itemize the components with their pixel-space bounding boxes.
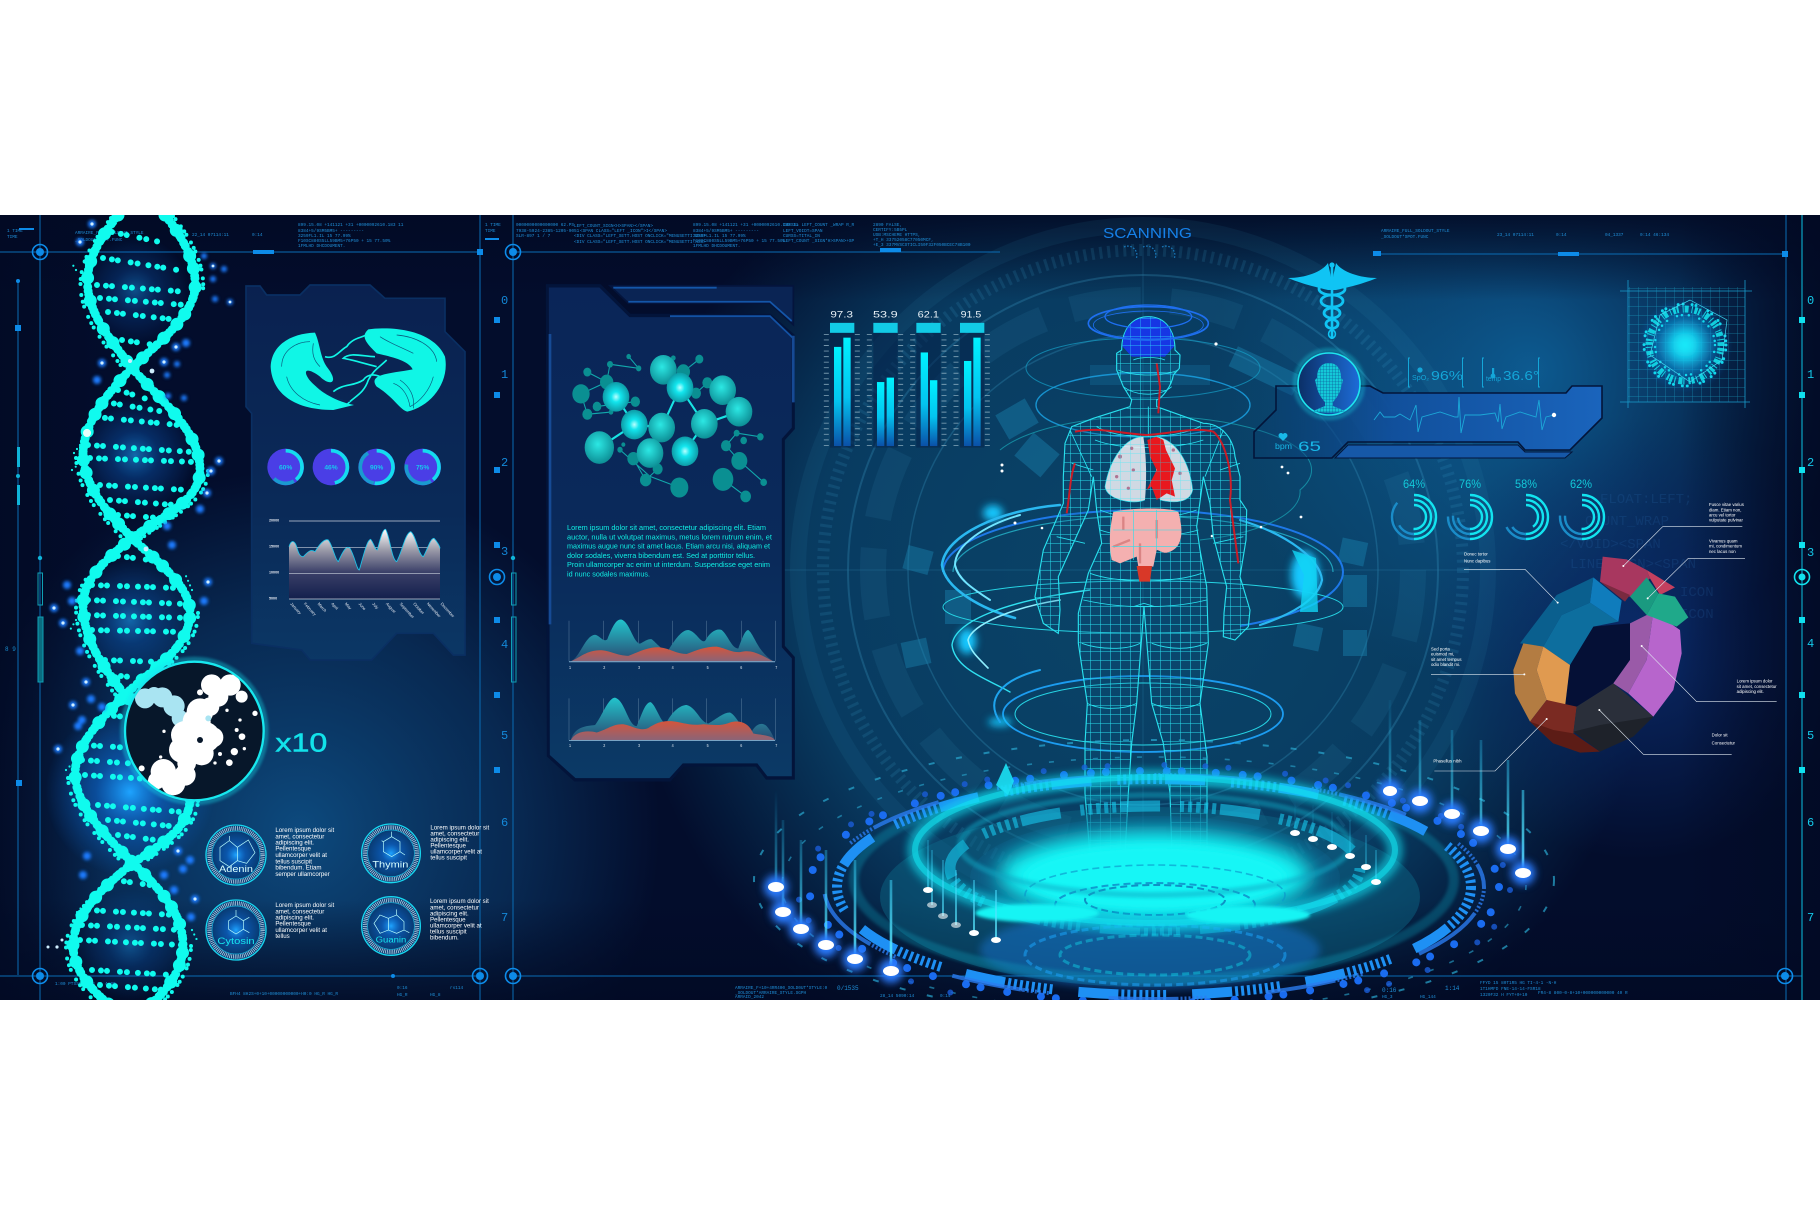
gauge 62 percent [1560,495,1604,539]
3D ring chart: euismod mi, [1431,652,1454,657]
area chart: August [385,601,398,615]
base: adenin: amet, consectetur [275,834,324,841]
DNA strands [66,215,208,1023]
micro text readouts: <SPAN CLASS="LEFT _ICON">I</SPAN> [580,229,667,234]
micro text readouts: LEFT_COUNT _SIGN*H>SPAN>+SP [783,239,855,244]
area chart two: 4 [672,743,674,748]
gauge 76 percent [1448,495,1492,539]
base: thymin: adipiscing elit. [430,837,469,844]
area chart: April [330,601,339,611]
micro text readouts: 1320F32 H FYT+0+10 [1480,993,1528,998]
micro text readouts: 0:14 46:134 [1640,233,1669,238]
bar chart: 62.1 [918,309,939,320]
area chart one: 6 [740,665,742,670]
base: adenin: semper ullamcorper [275,871,330,878]
area chart one: 3 [638,665,640,670]
base: thymin [362,824,489,883]
ring glows and swirls [942,342,1322,726]
frame lines and scale markers: 8 9 [5,646,16,653]
micro text readouts: 1:14 [1445,985,1460,992]
area chart two: 3 [638,743,640,748]
area chart: 15000 [269,545,279,549]
background: COUNT_WRAP [1585,514,1669,530]
area chart: March [317,601,328,613]
micro text readouts: HG_R [397,993,408,998]
base: thymin: amet, consectetur [430,831,479,838]
icon: caduceus [1288,262,1377,339]
background: FLOAT:LEFT; [1600,492,1692,508]
segment: blue [1520,577,1622,665]
area chart one: 2 [603,665,605,670]
panel text [567,523,772,578]
micro text readouts: 899.15.08 +141121 +31 +0000092610.183 11 [693,223,799,228]
panel text: Lorem ipsum dolor sit amet, consectetur adipiscing elit. Etiam [567,523,766,532]
base: cytosin: Lorem ipsum dolor sit [275,902,334,909]
micro text readouts: 04_1337 [1605,233,1624,238]
segment: charcoal [1573,683,1653,752]
heading: scanning: SCANNING [1103,225,1192,242]
brain cross-section [271,328,446,412]
bar chart: 91.5 [961,309,981,320]
micro text readouts: 0/1535 [837,985,859,992]
micro text readouts [7,223,1669,1000]
frame lines and scale markers: 6 [1807,816,1814,830]
progress dials: 46% [324,464,338,471]
bpm readout: bpm [1275,442,1292,451]
leader lines and labels [1431,527,1777,771]
area chart two: 7 [775,743,777,748]
background: ICON [1680,585,1714,601]
area chart: September [399,601,416,620]
frame lines and scale markers: 2 [1807,456,1814,470]
base: adenin [206,825,334,885]
area chart one: 4 [672,665,674,670]
area chart: June [358,601,368,612]
base: guanin: amet, consectetur [430,904,479,911]
progress dials: 75% [416,464,429,471]
micro text readouts: 28_14 5090:14 [880,994,915,999]
micro text readouts: F10SC880S5LL59BM5+76P50 + 15 77.50% [693,239,786,244]
base: adenin: bibendum. Etiam [275,865,322,872]
frame lines and scale markers: 1 [501,368,508,382]
base: cytosin: Pellentesque [275,920,312,927]
base: thymin: tellus suscipit [430,855,467,862]
micro text readouts: ARRAIRE_FULL_SOLDOUT_STYLE [75,231,144,236]
3D ring chart: sit amet tempus [1431,657,1462,662]
area chart two [569,698,777,748]
micro text readouts: CURSS= LEFT_COUNT _WRAP R_R [783,223,855,228]
panel: brain scan [246,285,465,660]
bpm readout: 65 [1298,438,1321,454]
base: thymin: Pellentesque [430,843,467,850]
segment: dark red [1530,700,1600,753]
bar chart [826,309,987,448]
micro text readouts: F10SC880S5LL59BM5+76P50 + 15 77.50% [298,239,391,244]
micro text readouts: 1 TIME [7,229,23,234]
panel text: dolor sodales, viverra bibendum est. Sed at porttitor tellus. [567,551,755,560]
background: </VOID><SPAN [1560,537,1661,553]
segment: green [1630,577,1688,627]
area chart [269,519,456,620]
micro text readouts: 0:14 [1556,233,1567,238]
3D ring chart: Vivamus quam [1709,539,1738,544]
platform beams [776,700,1523,971]
area chart: May [344,601,353,610]
base: adenin: adipiscing elit. [275,840,314,847]
micro text readouts: 0:14 [252,233,263,238]
area chart two: 5 [707,743,709,748]
base: guanin: Lorem ipsum dolor sit [430,898,489,905]
base: guanin: Guanin [376,934,407,944]
radial gauges: 64% [1403,477,1425,491]
platform nodes [764,779,1535,983]
progress dials [267,448,441,486]
micro text readouts: ARRAIRE_FULL_SOLDOUT_STYLE [1381,229,1450,234]
micro text readouts: CERTIFY:5B5PL [873,228,908,233]
vessels [1067,363,1238,563]
micro text readouts: <DIV CLASS="LEFT_SETT.HOST ONCLICK="MENUSETTI:NSS> [574,240,706,245]
base: cytosin: ullamcorper velit at [275,927,327,934]
holographic rings behind body [943,338,1343,752]
scanner platform [754,700,1554,1020]
micro text readouts: +T_H 33752058C77050MCF, [873,238,934,243]
area chart: November [426,601,442,619]
micro text readouts: 3259FL1.IL 15 77.99% [693,234,746,239]
base: thymin: Lorem ipsum dolor sit [430,825,489,832]
panel text: Proin ullamcorper ac enim ut interdum. Suspendisse eget enim [567,560,770,569]
frame lines and scale markers: 5 [1807,729,1814,743]
frame lines and scale markers: 7 [501,911,508,925]
base: guanin: bibendum. [430,935,459,942]
heading: scanning [1104,228,1191,258]
gauge 64 percent [1392,495,1436,539]
3D ring chart: vulputate pulvinar [1709,518,1743,523]
bar chart: 53.9 [873,309,898,320]
micro text readouts: 0000000000000000 62.PS [516,223,574,228]
micro text readouts: CURSS=TITAL_IN [783,234,820,239]
area chart: 20000 [269,519,279,523]
micro text readouts: 0:16 [397,986,408,991]
micro text readouts: LEFT_VOIDT=SPAN [783,229,823,234]
base: thymin: ullamcorper velit at [430,849,482,856]
3D ring chart: adipiscing elit. [1737,689,1764,694]
spo2 readout: SpO₂ [1412,375,1429,382]
3D ring chart: Nunc dapibus [1464,559,1490,564]
panel text: auctor, nulla ut volutpat maximus, metus lorem rutrum enim, et [567,532,772,541]
micro text readouts: 1:00 PTSSOUT_SM 31 4:00 [55,982,116,987]
3D ring chart: diam. Etiam non, [1709,507,1741,512]
panel text: maximus augue nunc sit amet lacus. Etiam arcu nisi, aliquam et [567,542,770,551]
segment: orange [1513,643,1570,722]
face avatar [1295,350,1363,418]
micro text readouts: 1T1HMFD FNE-14-14-FSR18 [1480,987,1541,992]
background [0,215,1820,1000]
frame lines and scale markers: 3 [1807,546,1814,560]
micro text readouts: 0:16 [1382,987,1397,994]
frame lines and scale markers: 1 [1807,368,1814,382]
area chart: 5000 [269,596,277,600]
frame lines and scale markers [0,215,1814,1000]
base: guanin: ullamcorper velit at [430,923,482,930]
micro text readouts: ARRAID_2042 [735,995,764,1000]
micro text readouts: _SOLDOUT*SPOT.FUNC [74,238,123,243]
magnifier x10 [124,660,327,802]
spo2 readout: 96% [1431,368,1464,383]
area chart one: 1 [569,665,571,670]
3D ring chart: mi, condimentum [1709,544,1742,549]
micro text readouts: rs114 [450,986,464,991]
brain [1123,317,1174,357]
3D ring chart: Donec tortor [1464,551,1488,556]
micro text readouts: HG_3 [1382,995,1393,1000]
micro text readouts: 8384+5/9SM5BM5+ --------- [298,229,364,234]
background: LINE_SIGN><SPAN [1570,557,1696,573]
base: adenin: Pellentesque [275,846,312,853]
base: guanin: tellus suscipit [430,929,467,936]
3D ring chart: nec lacus non [1709,549,1736,554]
frame lines and scale markers: 3 [501,545,508,559]
frame lines and scale markers: 2 [501,456,508,470]
area chart two: 2 [603,743,605,748]
micro text readouts: LEFT_COUNT_SIGN<H>SPAN></SPAN> [574,224,653,229]
bar chart: 97.3 [830,309,853,320]
panel text: id nunc sodales maximus. [567,569,650,578]
patient monitor panel [1254,350,1602,458]
frame lines and scale markers: 7 [1807,911,1814,925]
3D ring chart: Fusce vitae varius [1709,502,1744,507]
magnifier x10: x10 [275,728,327,758]
ecg trace [1374,397,1556,433]
bases: adenine, thymine, cytosine, guanine [206,824,489,960]
micro text readouts: 8384+5/9SM5BM5+ --------- [693,229,759,234]
segment: purple [1613,612,1682,717]
micro text readouts: 23_14 07114:11 [1497,233,1534,238]
area chart two: 1 [569,743,571,748]
base: cytosin [206,900,334,960]
3D ring chart: arcu vel tortor [1709,512,1736,517]
3D ring chart: Sed porta [1431,647,1450,652]
radial gauges [1392,477,1604,539]
micro text readouts: 1FMLHD DHCDOUMENT. [298,244,345,249]
micro text readouts: 22_14 07114:11 [192,233,229,238]
temperature readout: 36.6° [1503,368,1539,383]
area chart one [569,620,777,670]
area chart two: 6 [740,743,742,748]
halo rings over head [1088,305,1208,340]
micro text readouts: 1 TIME [485,223,501,228]
3D ring chart: odio blandit mi. [1431,662,1460,667]
micro text readouts: HG_144 [1420,995,1436,1000]
micro text readouts: TIME [7,235,18,240]
base: cytosin: adipiscing elit. [275,914,314,921]
radial gauges: 58% [1515,477,1537,491]
temperature readout: temp [1486,376,1501,383]
micro text readouts: 1FMLHD DHCDOUMENT. [693,244,740,249]
frame lines and scale markers: 5 [501,729,508,743]
base: thymin: Thymin [372,860,408,870]
radial gauges: 76% [1459,477,1481,491]
3D ring chart: Dolor sit [1712,733,1728,738]
3D ring chart: Phasellus nibh [1433,759,1462,764]
wireframe human body [1035,305,1250,855]
base: guanin: adipiscing elit. [430,910,469,917]
3D ring chart: Consectetur [1712,740,1736,745]
micro text readouts: _SOLDOUT*SPOT.FUNC [1380,235,1429,240]
micro text readouts: _SOLDOUT*ARRAIRE_STYLE.SGPH [734,991,807,996]
micro text readouts: FR4-8 800-0-8+10+000000000000 40 R [1538,991,1628,996]
DNA scattered particles [46,220,233,949]
area chart: 10000 [269,570,279,574]
base: guanin [362,897,489,955]
micro text readouts: ARRAIRE_F+10+4RR400_SOLD0UT*STYLE:0 [735,986,828,991]
DNA helix [45,215,233,1023]
base: cytosin: amet, consectetur [275,908,324,915]
micro text readouts: TIME [485,229,496,234]
micro text readouts: 0:14 [940,994,951,999]
area chart: July [371,601,380,610]
micro text readouts: 899.15.08 +141121 +31 +0000092610.183 11 [298,223,404,228]
micro text readouts: USB:MSCHEME HTTPS, [873,233,920,238]
micro text readouts: 7938-5924-2385-1205-9051 [516,229,580,234]
3D ring chart: sit amet, consectetur [1737,684,1777,689]
base: cytosin: tellus [275,933,290,940]
icon: particle globe [1620,280,1752,408]
micro text readouts: BFH4 8H2S+0+10+00000000000+H0:0 HG_R HG_R [230,992,338,997]
micro text readouts: HG_8 [430,993,441,998]
frame lines and scale markers: 6 [501,816,508,830]
molecule [572,354,767,502]
progress dials: 90% [370,464,383,471]
area chart one: 7 [775,665,777,670]
micro text readouts: FFYD 15 80T1R5 HG TI-4-1 -N-H [1480,981,1557,986]
3D ring chart: Lorem ipsum dolor [1737,679,1773,684]
gauge 58 percent [1504,495,1548,539]
3D ring chart [1431,502,1777,771]
lungs [1105,437,1193,502]
spo2 readout [1408,358,1464,387]
bpm readout [1275,433,1321,454]
area chart: January [289,601,302,615]
micro text readouts: <DIV CLASS="LEFT_SETT.HOST ONCLICK="MENUSETTI:NSS> [574,234,706,239]
area chart: February [303,601,317,617]
frame lines and scale markers: 0 [1807,294,1814,308]
frame lines and scale markers: 4 [501,638,508,652]
radial gauges: 62% [1570,477,1592,491]
area chart: December [440,601,456,619]
temperature readout [1482,358,1540,387]
base: cytosin: Cytosin [217,936,255,946]
frame lines and scale markers: 4 [1807,637,1814,651]
intestines [1110,509,1181,567]
background: ICON [1680,607,1714,623]
progress dials: 60% [279,464,292,471]
micro text readouts: 2890 FALSE, [873,223,902,228]
panel: molecule and text [547,286,793,780]
base: guanin: Pellentesque [430,916,466,923]
micro text readouts: +E_3 337MVSCSTICLI50F32F050BCEC78B100 [873,243,971,248]
micro text readouts: 3259FL1.IL 15 77.99% [298,234,351,239]
area chart one: 5 [707,665,709,670]
base: adenin: Adenin [219,864,253,874]
micro text readouts: SLR-897 1 / 7 [516,234,551,239]
base: adenin: Lorem ipsum dolor sit [275,827,334,834]
segment: magenta [1600,557,1675,602]
area chart: October [412,601,426,616]
base: adenin: ullamcorper velit at [275,852,327,859]
frame lines and scale markers: 0 [501,294,508,308]
base: adenin: tellus suscipit [275,858,312,865]
